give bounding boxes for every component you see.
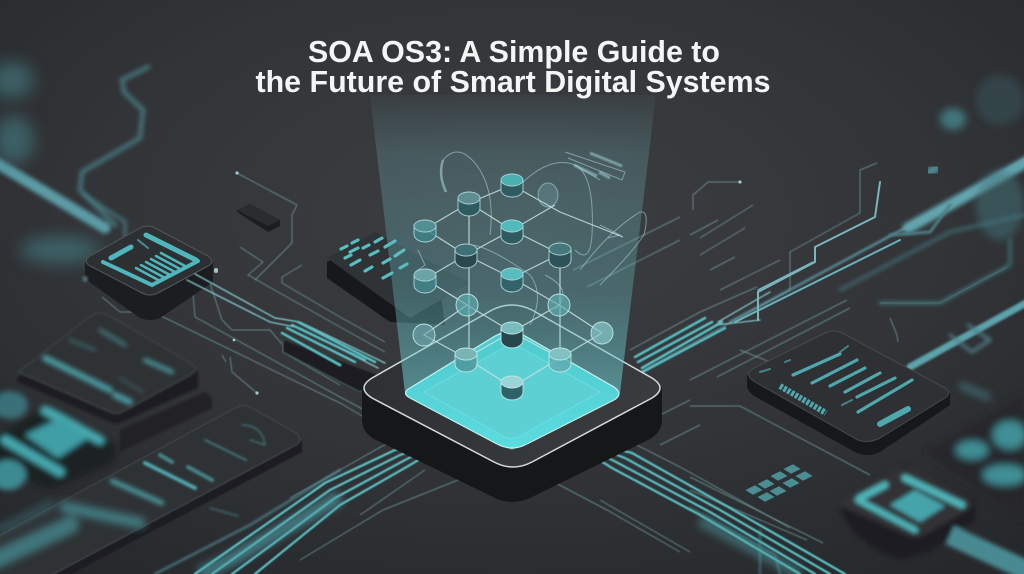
hologram beam	[370, 95, 656, 450]
wire bundle: upper right	[635, 292, 770, 375]
faint blobs: upper left	[0, 62, 100, 264]
chip: upper left	[82, 226, 218, 320]
back dark card	[120, 392, 212, 452]
node row 2	[413, 294, 613, 400]
card: blurred cyan chip	[0, 391, 117, 490]
wire blur: lower left	[200, 497, 340, 574]
wire bundle: upper left	[187, 274, 385, 392]
network edges	[424, 185, 623, 387]
small grid of cells	[745, 464, 813, 502]
title line 1: SOA OS3: A Simple Guide to	[308, 34, 720, 69]
small dark block	[237, 204, 280, 232]
trace end points	[214, 171, 742, 479]
title	[256, 34, 770, 99]
wire bundle: lower right	[580, 445, 845, 574]
wire blur: lower right	[700, 520, 800, 574]
hologram outlines	[415, 152, 646, 325]
panel: right blurred card	[925, 385, 1024, 520]
faint blobs: upper right	[940, 75, 1024, 240]
hologram text marks	[574, 153, 622, 178]
chip top	[364, 305, 660, 467]
card: top left	[17, 313, 198, 423]
panel: left blurred cards	[0, 313, 302, 574]
node row 1	[414, 174, 571, 293]
title line 2: the Future of Smart Digital Systems	[256, 64, 770, 99]
chip: lower right	[840, 465, 1024, 572]
hologram orb	[538, 183, 558, 207]
streaks: upper right	[730, 158, 1024, 367]
panel: left behind hologram	[327, 232, 470, 325]
panel: right data card	[747, 331, 950, 455]
pad inset	[424, 345, 600, 438]
chip base	[362, 388, 662, 502]
blurred streaks: upper left	[0, 67, 148, 238]
wire bundle: lower left	[155, 444, 440, 574]
network nodes	[413, 174, 613, 400]
cyan pad	[406, 332, 619, 448]
central chip	[362, 305, 662, 502]
thin circuit traces	[102, 163, 1007, 560]
card text bars	[112, 425, 265, 516]
card: long bottom left	[0, 406, 302, 574]
